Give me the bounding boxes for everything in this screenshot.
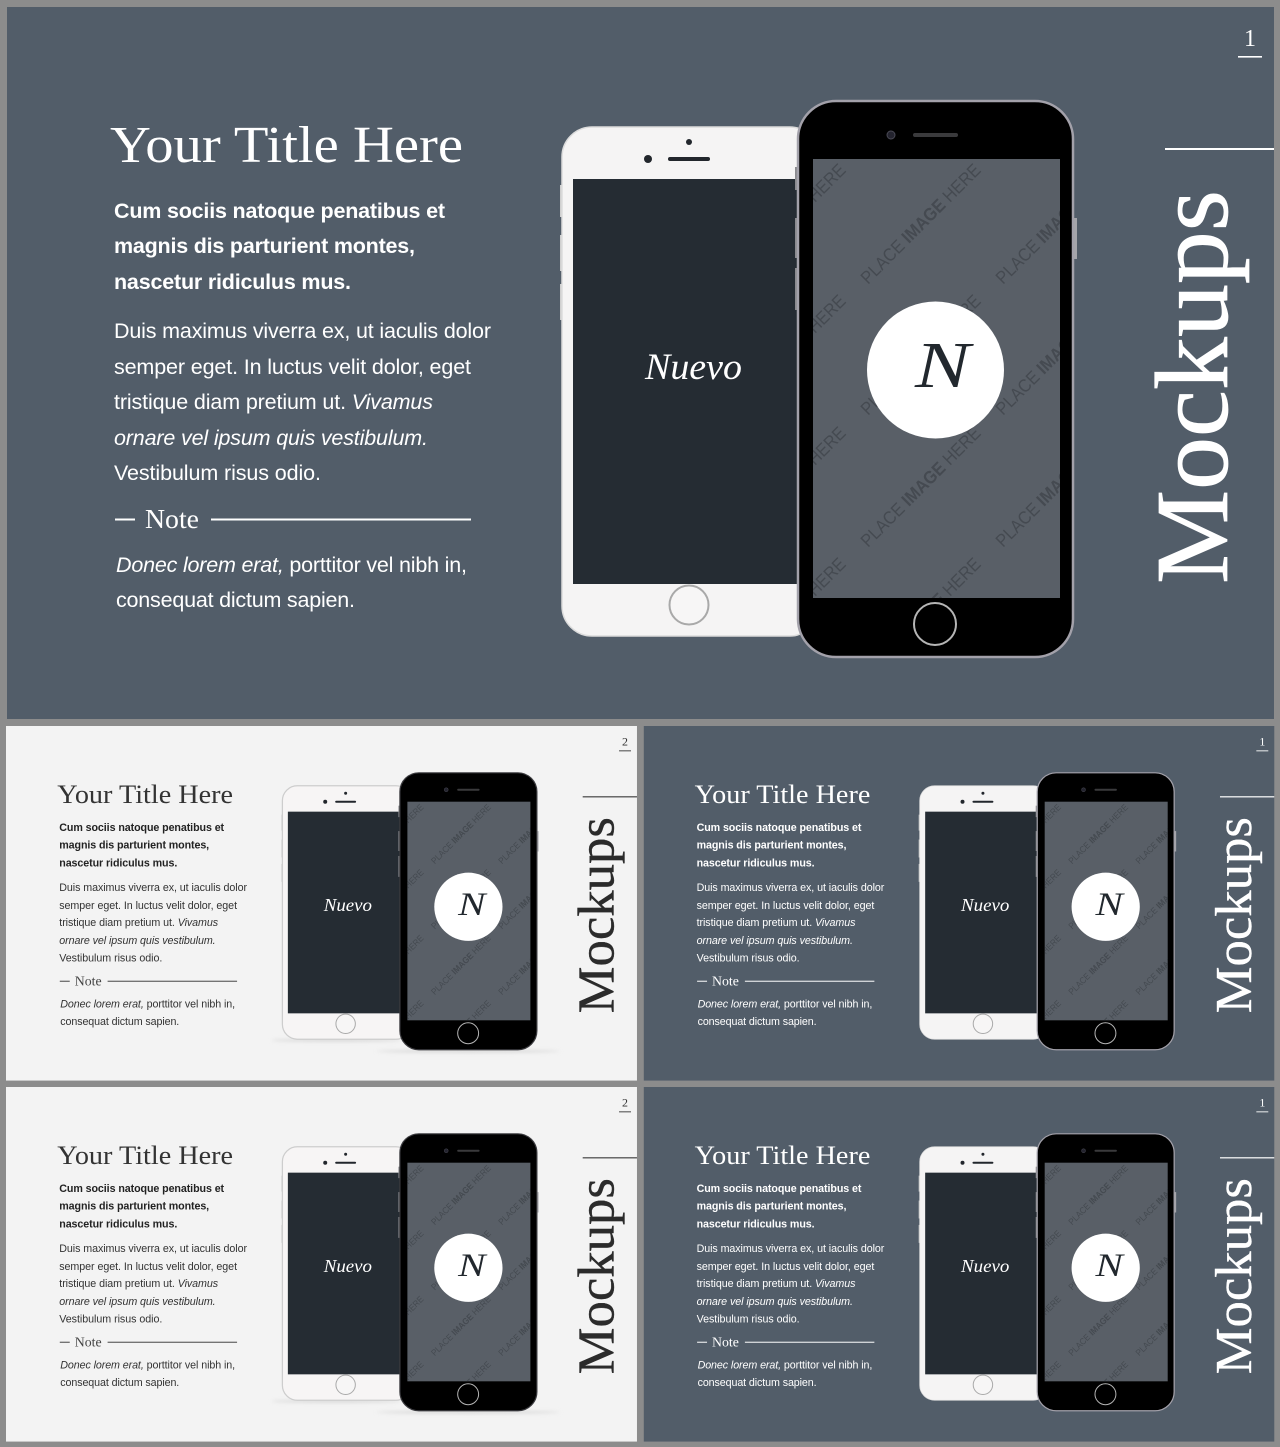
note divider: Note <box>712 973 739 988</box>
logo circle <box>1072 1234 1140 1302</box>
body text: tristique diam pretium ut. Vivamus <box>59 917 219 929</box>
image placeholder watermark: PLACE IMAGE HERE <box>362 933 426 997</box>
image placeholder watermark: PLACE IMAGE HERE <box>362 998 426 1062</box>
note text: Donec lorem erat, porttitor vel nibh in, <box>116 553 467 577</box>
image placeholder watermark: PLACE IMAGE HERE <box>362 1359 426 1423</box>
image placeholder watermark: PLACE IMAGE HERE <box>429 933 493 997</box>
body text: semper eget. In luctus velit dolor, eget <box>59 1261 237 1273</box>
image placeholder watermark: PLACE IMAGE HERE <box>999 867 1063 931</box>
body text: Duis maximus viverra ex, ut iaculis dolor <box>697 1243 885 1255</box>
image placeholder watermark: PLACE IMAGE HERE <box>1066 998 1130 1062</box>
image placeholder watermark <box>408 804 530 1020</box>
note divider: Note <box>75 973 102 988</box>
image placeholder watermark: PLACE IMAGE HERE <box>1066 802 1130 866</box>
panel: small dark slide bottom right <box>644 1087 1274 1442</box>
image placeholder watermark: PLACE IMAGE HERE <box>992 423 1120 551</box>
body text: semper eget. In luctus velit dolor, eget <box>697 1261 874 1273</box>
logo circle: N <box>457 887 488 923</box>
image placeholder watermark: PLACE IMAGE HERE <box>496 933 560 997</box>
body text <box>59 882 247 965</box>
image placeholder watermark: PLACE IMAGE HERE <box>722 291 850 419</box>
black phone <box>398 1133 539 1412</box>
logo circle: N <box>1094 1248 1125 1284</box>
image placeholder watermark: PLACE IMAGE HERE <box>429 867 493 931</box>
side rule <box>1220 796 1274 797</box>
screen label: Nuevo <box>960 1256 1009 1276</box>
side rule <box>583 796 637 797</box>
image placeholder watermark: PLACE IMAGE HERE <box>362 1294 426 1358</box>
image placeholder watermark: PLACE IMAGE HERE <box>496 1228 560 1292</box>
image placeholder watermark: PLACE IMAGE HERE <box>1066 1294 1130 1358</box>
image placeholder watermark: PLACE IMAGE HERE <box>992 291 1120 419</box>
image placeholder watermark: PLACE IMAGE HERE <box>999 802 1063 866</box>
image placeholder watermark <box>1045 1165 1168 1381</box>
image placeholder watermark: PLACE IMAGE HERE <box>1134 933 1197 997</box>
black phone <box>398 772 539 1050</box>
image placeholder watermark: PLACE IMAGE HERE <box>1134 1163 1197 1227</box>
image placeholder watermark: PLACE IMAGE HERE <box>722 554 850 682</box>
image placeholder watermark: PLACE IMAGE HERE <box>429 1294 493 1358</box>
phone shadows <box>271 1039 560 1052</box>
white phone <box>281 1147 404 1400</box>
body text: Vestibulum risus odio. <box>697 953 800 965</box>
note text: Donec lorem erat, porttitor vel nibh in, <box>60 998 235 1010</box>
body text: semper eget. In luctus velit dolor, eget <box>114 355 471 379</box>
image placeholder watermark: PLACE IMAGE HERE <box>429 998 493 1062</box>
body text: Duis maximus viverra ex, ut iaculis dolor <box>59 882 247 894</box>
note divider: Note <box>75 1334 102 1349</box>
page number: 1 <box>1259 734 1265 748</box>
note text: Donec lorem erat, porttitor vel nibh in, <box>60 1359 235 1371</box>
note text: Donec lorem erat, porttitor vel nibh in, <box>698 998 872 1010</box>
bold intro text: Cum sociis natoque penatibus et <box>59 1183 225 1195</box>
body text: Duis maximus viverra ex, ut iaculis dolor <box>59 1243 247 1255</box>
panel: small light slide bottom left <box>6 1087 637 1442</box>
page number <box>1238 26 1262 58</box>
image placeholder watermark <box>408 1165 530 1381</box>
image placeholder watermark: PLACE IMAGE HERE <box>999 998 1063 1062</box>
vertical heading: Mockups <box>1135 190 1250 584</box>
image placeholder watermark: PLACE IMAGE HERE <box>496 802 560 866</box>
image placeholder watermark: PLACE IMAGE HERE <box>1066 1359 1130 1423</box>
bold intro text: Cum sociis natoque penatibus et <box>114 199 445 223</box>
body text: tristique diam pretium ut. Vivamus <box>59 1278 219 1290</box>
page number <box>1256 1095 1268 1112</box>
page number <box>619 1095 631 1112</box>
image placeholder watermark: PLACE IMAGE HERE <box>1066 1228 1130 1292</box>
image placeholder watermark: PLACE IMAGE HERE <box>722 160 850 288</box>
image placeholder watermark: PLACE IMAGE HERE <box>496 1294 560 1358</box>
image placeholder watermark: PLACE IMAGE HERE <box>1066 867 1130 931</box>
logo circle <box>867 302 1004 438</box>
vertical heading: Mockups <box>569 1178 626 1374</box>
logo circle: N <box>1094 887 1125 923</box>
panel: main dark slide <box>7 7 1274 719</box>
body text: tristique diam pretium ut. Vivamus <box>114 390 433 414</box>
bold intro text: magnis dis parturient montes, <box>59 840 209 852</box>
body text: semper eget. In luctus velit dolor, eget <box>697 900 874 912</box>
bold intro text <box>59 822 225 869</box>
side rule <box>1220 1157 1274 1158</box>
logo circle <box>1072 873 1140 941</box>
image placeholder watermark: PLACE IMAGE HERE <box>999 1294 1063 1358</box>
page number <box>1256 734 1268 751</box>
image placeholder watermark: PLACE IMAGE HERE <box>999 1359 1063 1423</box>
body text: Duis maximus viverra ex, ut iaculis dolor <box>114 319 491 343</box>
image placeholder watermark: PLACE IMAGE HERE <box>857 554 985 682</box>
note text <box>698 998 872 1028</box>
image placeholder watermark: PLACE IMAGE HERE <box>857 160 985 288</box>
bold intro text: Cum sociis natoque penatibus et <box>697 822 862 834</box>
body text: Vestibulum risus odio. <box>114 461 321 485</box>
image placeholder watermark: PLACE IMAGE HERE <box>1134 867 1197 931</box>
body text: ornare vel ipsum quis vestibulum. <box>59 1296 216 1308</box>
vertical heading: Mockups <box>1206 1178 1263 1374</box>
bold intro text: nascetur ridiculus mus. <box>697 857 815 869</box>
note text <box>60 998 235 1028</box>
body text: semper eget. In luctus velit dolor, eget <box>59 900 237 912</box>
title: Your Title Here <box>57 780 233 809</box>
title: Your Title Here <box>110 117 463 174</box>
note text <box>116 553 467 612</box>
white phone <box>919 786 1041 1039</box>
note text: consequat dictum sapien. <box>60 1377 179 1389</box>
bold intro text: magnis dis parturient montes, <box>697 1201 846 1213</box>
body text: Duis maximus viverra ex, ut iaculis dolor <box>697 882 885 894</box>
logo circle: N <box>457 1248 488 1284</box>
title: Your Title Here <box>57 1141 233 1170</box>
image placeholder watermark: PLACE IMAGE HERE <box>1066 933 1130 997</box>
note text: consequat dictum sapien. <box>116 588 355 612</box>
image placeholder watermark <box>813 163 1060 598</box>
screen label: Nuevo <box>323 1256 372 1276</box>
note text: consequat dictum sapien. <box>698 1016 817 1028</box>
image placeholder watermark: PLACE IMAGE HERE <box>362 1228 426 1292</box>
phone shadows <box>271 1400 560 1413</box>
image placeholder watermark: PLACE IMAGE HERE <box>362 1163 426 1227</box>
note text <box>60 1359 235 1389</box>
black phone <box>1036 772 1176 1050</box>
bold intro text: Cum sociis natoque penatibus et <box>697 1183 862 1195</box>
screen label: Nuevo <box>323 895 372 915</box>
image placeholder watermark: PLACE IMAGE HERE <box>1134 1228 1197 1292</box>
image placeholder watermark: PLACE IMAGE HERE <box>992 160 1120 288</box>
bold intro text <box>114 199 445 294</box>
image placeholder watermark: PLACE IMAGE HERE <box>1134 1294 1197 1358</box>
image placeholder watermark: PLACE IMAGE HERE <box>999 933 1063 997</box>
white phone <box>281 786 404 1039</box>
bold intro text <box>59 1183 225 1230</box>
image placeholder watermark: PLACE IMAGE HERE <box>429 1228 493 1292</box>
side rule <box>583 1157 637 1158</box>
body text <box>697 1243 885 1326</box>
bold intro text <box>697 1183 862 1230</box>
panel: small light slide top left <box>6 726 637 1081</box>
screen label: Nuevo <box>644 347 742 388</box>
bold intro text: magnis dis parturient montes, <box>697 840 846 852</box>
image placeholder watermark: PLACE IMAGE HERE <box>857 291 985 419</box>
body text <box>114 319 491 485</box>
image placeholder watermark: PLACE IMAGE HERE <box>1134 802 1197 866</box>
side rule <box>1165 148 1274 150</box>
body text: Vestibulum risus odio. <box>59 953 162 965</box>
image placeholder watermark: PLACE IMAGE HERE <box>429 802 493 866</box>
body text <box>697 882 885 965</box>
black phone <box>1036 1133 1176 1412</box>
page number: 1 <box>1244 26 1256 52</box>
note text: Donec lorem erat, porttitor vel nibh in, <box>698 1359 872 1371</box>
body text: ornare vel ipsum quis vestibulum. <box>697 1296 853 1308</box>
logo circle: N <box>914 329 975 402</box>
image placeholder watermark: PLACE IMAGE HERE <box>429 1359 493 1423</box>
note text: consequat dictum sapien. <box>698 1377 817 1389</box>
note text <box>698 1359 872 1389</box>
note text: consequat dictum sapien. <box>60 1016 179 1028</box>
vertical heading: Mockups <box>1206 817 1263 1013</box>
image placeholder watermark: PLACE IMAGE HERE <box>999 1228 1063 1292</box>
bold intro text: nascetur ridiculus mus. <box>59 857 177 869</box>
bold intro text: magnis dis parturient montes, <box>59 1201 209 1213</box>
bold intro text: Cum sociis natoque penatibus et <box>59 822 225 834</box>
title: Your Title Here <box>695 780 870 809</box>
body text: ornare vel ipsum quis vestibulum. <box>697 935 853 947</box>
bold intro text: nascetur ridiculus mus. <box>114 270 351 294</box>
page number <box>619 734 631 751</box>
white phone <box>919 1147 1041 1400</box>
body text: Vestibulum risus odio. <box>59 1314 162 1326</box>
title: Your Title Here <box>695 1141 870 1170</box>
image placeholder watermark: PLACE IMAGE HERE <box>722 423 850 551</box>
body text: tristique diam pretium ut. Vivamus <box>697 917 856 929</box>
image placeholder watermark: PLACE IMAGE HERE <box>1066 1163 1130 1227</box>
image placeholder watermark: PLACE IMAGE HERE <box>857 423 985 551</box>
body text: tristique diam pretium ut. Vivamus <box>697 1278 856 1290</box>
bold intro text <box>697 822 862 869</box>
image placeholder watermark: PLACE IMAGE HERE <box>362 802 426 866</box>
logo circle <box>434 873 503 941</box>
image placeholder watermark: PLACE IMAGE HERE <box>496 1163 560 1227</box>
note divider: Note <box>145 504 199 534</box>
logo circle <box>434 1234 503 1302</box>
panel: small dark slide top right <box>644 726 1274 1081</box>
body text: ornare vel ipsum quis vestibulum. <box>59 935 216 947</box>
page number: 2 <box>622 1095 628 1109</box>
body text: Vestibulum risus odio. <box>697 1314 800 1326</box>
white phone <box>560 127 806 636</box>
page number: 2 <box>622 734 628 748</box>
body text: ornare vel ipsum quis vestibulum. <box>114 426 428 450</box>
image placeholder watermark: PLACE IMAGE HERE <box>429 1163 493 1227</box>
image placeholder watermark <box>1045 804 1168 1020</box>
page number: 1 <box>1259 1095 1265 1109</box>
image placeholder watermark: PLACE IMAGE HERE <box>496 867 560 931</box>
bold intro text: nascetur ridiculus mus. <box>697 1218 815 1230</box>
image placeholder watermark: PLACE IMAGE HERE <box>999 1163 1063 1227</box>
screen label: Nuevo <box>960 895 1009 915</box>
bold intro text: magnis dis parturient montes, <box>114 234 415 258</box>
bold intro text: nascetur ridiculus mus. <box>59 1218 177 1230</box>
body text <box>59 1243 247 1326</box>
image placeholder watermark: PLACE IMAGE HERE <box>362 867 426 931</box>
note divider: Note <box>712 1334 739 1349</box>
black phone <box>795 100 1077 658</box>
vertical heading: Mockups <box>569 817 626 1013</box>
